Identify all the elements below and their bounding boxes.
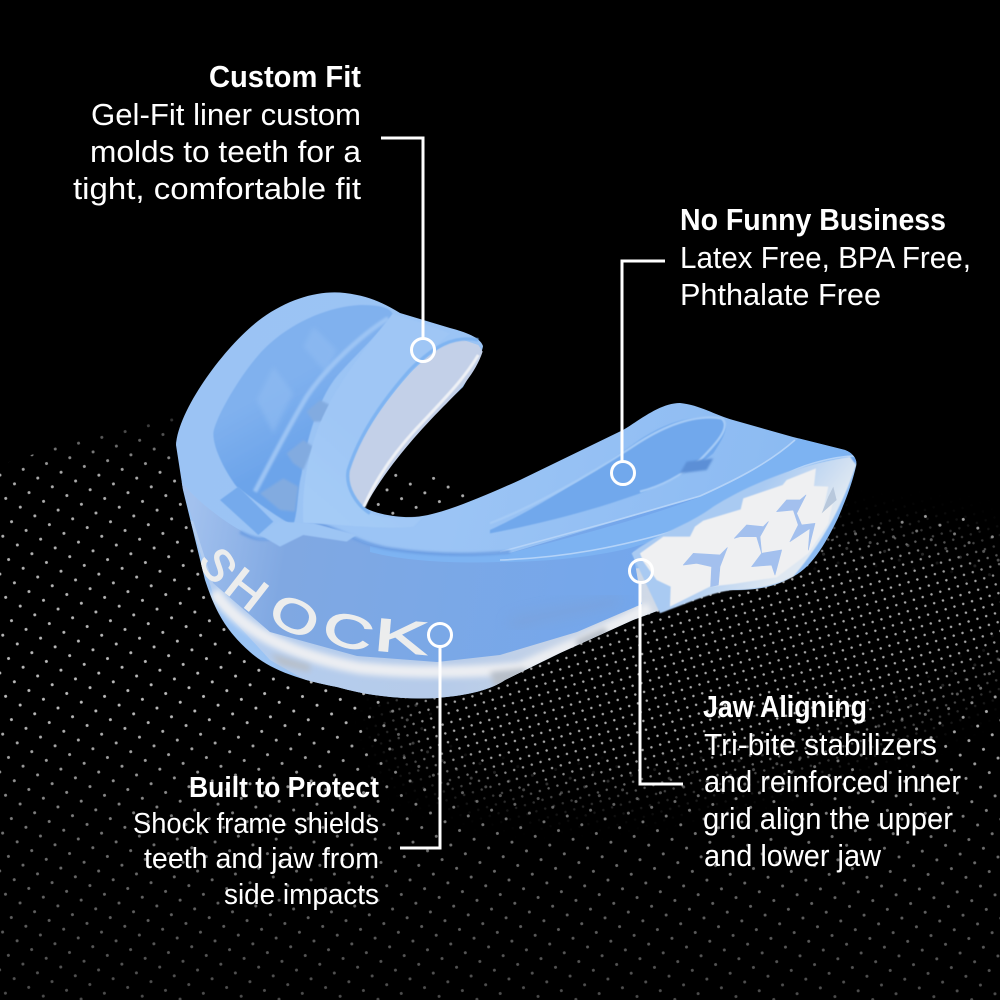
text: custom fit body: tight, comfortable fit xyxy=(73,171,361,206)
callout: no funny business xyxy=(680,202,971,312)
text: built to protect body: Shock frame shields xyxy=(133,808,379,840)
text: custom fit body: molds to teeth for a xyxy=(90,134,362,169)
leader: no funny business xyxy=(612,261,665,484)
SHOCK logo: K xyxy=(372,609,430,664)
text: no funny business body: Latex Free, BPA Free, xyxy=(680,240,971,275)
left arm details (zoom coordinates) xyxy=(213,305,483,547)
rim fine lines xyxy=(500,440,854,560)
heading: jaw aligning: Jaw Aligning xyxy=(703,689,867,724)
tray soft panels xyxy=(257,327,337,433)
inner white wall xyxy=(347,340,483,508)
leader: built to protect xyxy=(400,624,452,848)
SHOCK logo: O xyxy=(262,583,327,650)
text: jaw aligning body: grid align the upper xyxy=(703,801,953,836)
tray shadow xyxy=(680,458,713,473)
text: jaw aligning body: and lower jaw xyxy=(704,838,882,873)
center ridge xyxy=(255,318,388,492)
text: no funny business body xyxy=(680,240,971,312)
text: no funny business body: Phthalate Free xyxy=(680,277,881,312)
front wall xyxy=(180,450,860,662)
gray bite marks xyxy=(270,627,610,688)
right arm details (zoom coordinates) xyxy=(490,417,856,613)
text: built to protect body: side impacts xyxy=(224,879,379,911)
heading: no funny business: No Funny Business xyxy=(680,202,946,237)
front corner block xyxy=(220,487,273,535)
leader: custom fit xyxy=(381,138,434,362)
text: custom fit body: Gel-Fit liner custom xyxy=(91,97,361,132)
rim band right xyxy=(370,437,856,563)
text: built to protect body xyxy=(133,808,379,911)
text: custom fit body xyxy=(73,97,362,206)
white inner highlight xyxy=(364,355,478,507)
callout: custom fit xyxy=(73,59,362,206)
wall soft shadow xyxy=(510,600,620,625)
tray sockets xyxy=(260,400,333,512)
tray ridge lines xyxy=(490,417,725,523)
text: jaw aligning body: and reinforced inner xyxy=(704,764,961,799)
text: jaw aligning body xyxy=(703,727,961,873)
inner lip xyxy=(303,314,450,528)
teeth base xyxy=(632,457,856,613)
translucent bottom strip xyxy=(190,520,660,698)
leader: jaw aligning xyxy=(630,560,683,784)
mouthguard illustration xyxy=(170,285,865,705)
callout: built to protect xyxy=(133,772,379,911)
right tray xyxy=(490,417,726,533)
rear tooth shading xyxy=(822,487,837,513)
inner tray xyxy=(213,305,393,525)
dotted wave background xyxy=(0,418,1000,1000)
white highlight band xyxy=(214,592,650,672)
SHOCK logo: H xyxy=(216,557,278,622)
heading: custom fit: Custom Fit xyxy=(209,59,361,94)
text: built to protect body: teeth and jaw from xyxy=(144,843,379,875)
SHOCK logo: S xyxy=(189,539,247,591)
blue lip edge xyxy=(348,339,478,513)
callout: jaw aligning xyxy=(703,689,961,873)
tooth gaps xyxy=(683,495,815,587)
heading: built to protect: Built to Protect xyxy=(189,772,379,804)
white teeth blocks xyxy=(640,468,833,607)
SHOCK logo: C xyxy=(317,601,379,663)
text: jaw aligning body: Tri-bite stabilizers xyxy=(704,727,937,762)
SHOCK logo xyxy=(201,549,428,656)
guard body xyxy=(170,285,865,705)
